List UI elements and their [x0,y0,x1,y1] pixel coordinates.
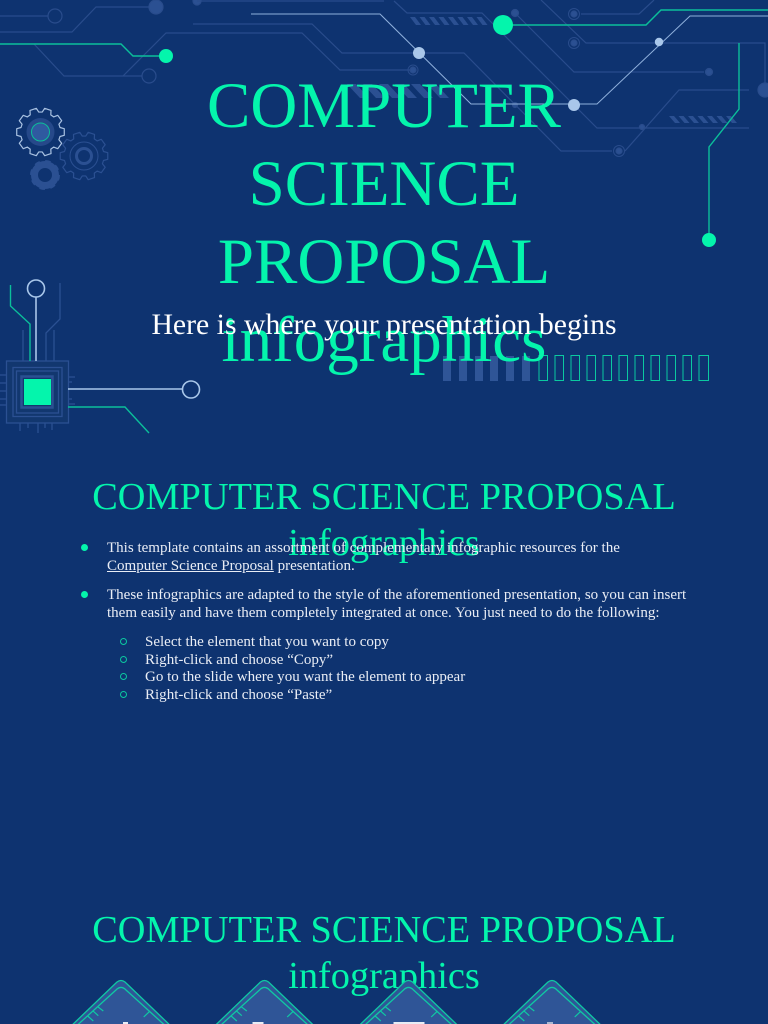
badge 1 [67,980,175,1024]
heading: section two: COMPUTER SCIENCE PROPOSAL [92,909,676,951]
paragraph two [107,587,686,621]
chip light traces [28,280,200,398]
title: COMPUTER [207,70,561,142]
heading: section one: COMPUTER SCIENCE PROPOSAL [92,476,676,518]
icon: light gear [17,108,64,156]
title: SCIENCE [249,148,519,220]
subtitle: Here is where your presentation begins [151,308,617,341]
step 3: Go to the slide where you want the element to appear [145,669,465,685]
chip pins [0,283,75,433]
paragraph two: These infographics are adapted to the style of the aforementioned presentation, so you can insert [107,587,686,603]
title: PROPOSAL [218,226,550,298]
circuit traces: top right [394,0,768,156]
missing-glyph boxes [539,356,708,380]
decorative bars [443,356,530,381]
chip core [24,379,51,405]
step 2: Right-click and choose “Copy” [145,652,333,668]
heading: section two [92,909,676,997]
badge 4 [498,980,606,1024]
chip green traces [10,285,149,433]
green signal traces [0,10,768,247]
paragraph two: them easily and have them completely integrated at once. You just need to do the following: [107,605,660,621]
badge 3 [354,980,462,1024]
heading: section one: infographics [288,522,480,564]
icon: dark gear [60,132,108,180]
icon: gears [17,108,108,188]
title: infographics [222,304,546,376]
step 1: Select the element that you want to copy [145,634,389,650]
heading: section one [92,476,676,564]
icon: microchip with traces [0,280,200,433]
paragraph one: This template contains an assortment of complementary infographic resources for the [107,540,620,556]
hatched stripes [347,17,737,123]
step 4: Right-click and choose “Paste” [145,687,332,703]
paragraph one: Computer Science Proposal presentation. [107,558,355,574]
chip body [6,361,68,423]
steps list [120,634,466,703]
badge 2 [210,980,318,1024]
text block: instructions [81,540,686,703]
light signal trace [251,14,768,111]
icon: small gear [32,162,58,188]
circuit traces: top left [0,0,612,151]
title [207,70,561,376]
bullet two [81,591,88,598]
heading: section two: infographics [288,955,480,997]
bullet one [81,544,88,551]
paragraph one [107,540,620,574]
